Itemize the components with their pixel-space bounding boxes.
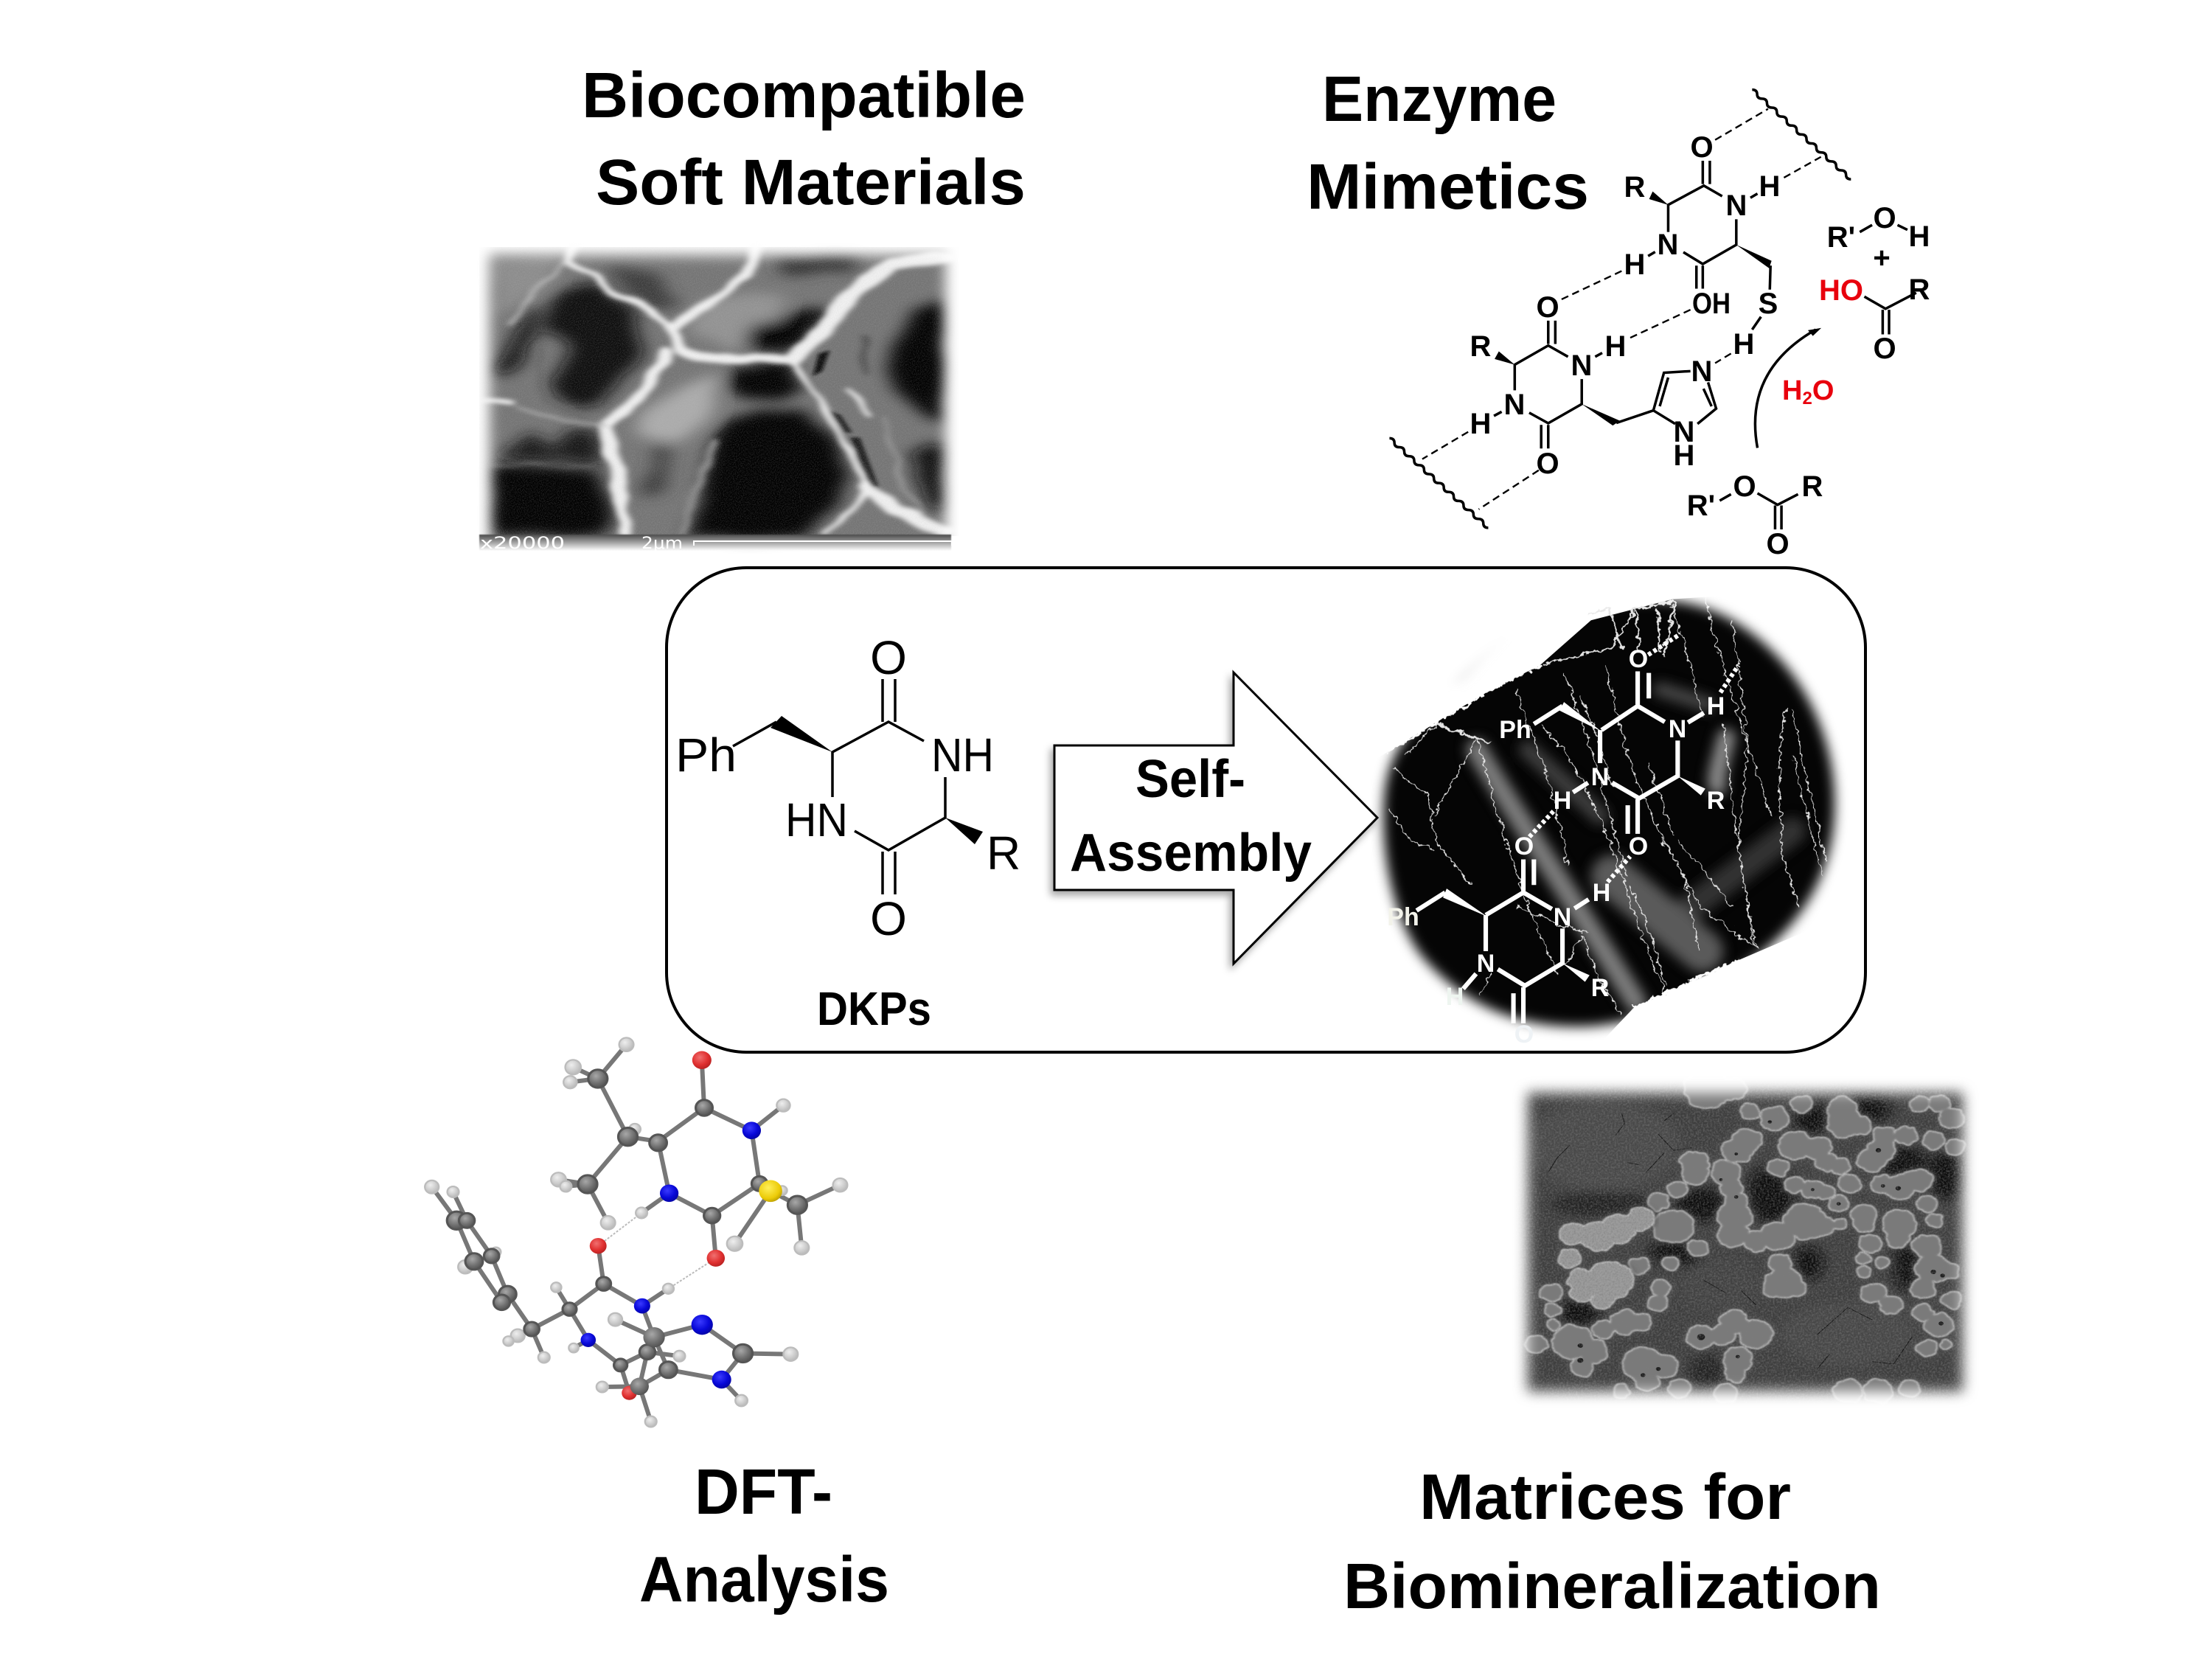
heading: Matrices for Biomineralization	[1343, 1461, 1881, 1622]
heading: DFT-Analysis: DFT-	[695, 1456, 832, 1528]
enzyme mimetic hydrogen-bonded catalytic structure: R'	[1687, 490, 1715, 522]
fibre network micrograph with molecular overlay: R	[1591, 974, 1609, 1002]
heading: Biocompatible Soft Materials	[582, 60, 1026, 218]
infographic canvas	[424, 71, 1973, 1615]
fibre network micrograph with molecular overlay: N	[1591, 763, 1609, 791]
enzyme mimetic hydrogen-bonded catalytic structure: H	[1733, 328, 1754, 361]
fibre network micrograph with molecular overlay: O	[1514, 832, 1534, 860]
DKP chemical structure	[675, 631, 1020, 945]
fibre network micrograph with molecular overlay: H	[1593, 879, 1610, 907]
enzyme mimetic hydrogen-bonded catalytic structure: H	[1674, 439, 1694, 472]
DKP chemical structure: HN	[785, 793, 848, 846]
enzyme mimetic hydrogen-bonded catalytic structure: OH	[1692, 288, 1731, 320]
fibre network micrograph with molecular overlay: R	[1707, 787, 1725, 815]
weak hydrogen bonds	[598, 1213, 716, 1289]
enzyme mimetic hydrogen-bonded catalytic structure: N	[1691, 355, 1712, 388]
enzyme mimetic hydrogen-bonded catalytic structure: R'	[1827, 221, 1855, 254]
enzyme mimetic hydrogen-bonded catalytic structure: N	[1674, 416, 1694, 448]
stereo wedges	[1495, 192, 1772, 425]
DKP chemical structure: NH	[931, 728, 994, 782]
enzyme mimetic hydrogen-bonded catalytic structure: O	[1873, 202, 1896, 234]
enzyme mimetic hydrogen-bonded catalytic structure: N	[1658, 229, 1678, 261]
enzyme mimetic hydrogen-bonded catalytic structure: N	[1571, 349, 1592, 382]
heading: Enzyme Mimetics	[1307, 63, 1589, 223]
fibre network micrograph with molecular overlay: N	[1477, 950, 1495, 978]
fibre network micrograph with molecular overlay: Ph	[1499, 716, 1531, 744]
fibre network micrograph with molecular overlay: H	[1446, 983, 1464, 1011]
wavy backbone lines	[1389, 90, 1851, 528]
enzyme mimetic hydrogen-bonded catalytic structure: N	[1726, 189, 1747, 222]
SEM scale bar	[479, 535, 952, 553]
heading: Matrices for Biomineralization: Matrices for	[1419, 1461, 1791, 1533]
enzyme mimetic hydrogen-bonded catalytic structure: HO	[1819, 274, 1863, 307]
DKP chemical structure: R	[987, 827, 1020, 880]
fibre network micrograph with molecular overlay	[1373, 597, 1845, 1043]
self-assembly arrow: Assembly	[1070, 824, 1312, 883]
enzyme mimetic hydrogen-bonded catalytic structure: H	[1605, 330, 1626, 363]
enzyme mimetic hydrogen-bonded catalytic structure	[1389, 90, 1930, 560]
enzyme mimetic hydrogen-bonded catalytic structure: O	[1733, 470, 1756, 503]
enzyme mimetic hydrogen-bonded catalytic structure: 2	[1802, 389, 1812, 408]
SEM micrograph: fibrous soft material	[479, 243, 959, 537]
enzyme mimetic hydrogen-bonded catalytic structure: O	[1812, 375, 1834, 406]
enzyme mimetic hydrogen-bonded catalytic structure: R	[1624, 171, 1646, 204]
enzyme mimetic hydrogen-bonded catalytic structure: H	[1624, 248, 1645, 281]
SEM micrograph: biomineral aggregates	[1517, 1082, 1973, 1402]
heading: Enzyme Mimetics: Enzyme	[1322, 63, 1557, 135]
enzyme mimetic hydrogen-bonded catalytic structure: H	[1909, 220, 1930, 253]
ester and products bonds	[1719, 225, 1916, 529]
fibre network micrograph with molecular overlay: H	[1707, 692, 1725, 720]
enzyme mimetic hydrogen-bonded catalytic structure: R	[1909, 274, 1930, 306]
heading: Matrices for Biomineralization: Biomineralization	[1343, 1551, 1881, 1622]
carbon atoms	[447, 1070, 807, 1378]
enzyme mimetic hydrogen-bonded catalytic structure: R	[1470, 330, 1492, 363]
reaction arrow	[1755, 330, 1815, 448]
enzyme mimetic hydrogen-bonded catalytic structure: O	[1873, 333, 1896, 365]
enzyme mimetic hydrogen-bonded catalytic structure: O	[1536, 291, 1559, 324]
lower DKP ring bonds	[1494, 321, 1717, 448]
fibre network micrograph with molecular overlay: H	[1554, 787, 1571, 815]
heading: DFT-Analysis: Analysis	[639, 1544, 889, 1615]
hydrogen atoms	[425, 1037, 847, 1427]
enzyme mimetic hydrogen-bonded catalytic structure: H	[1759, 170, 1780, 203]
stick bonds	[432, 1045, 840, 1422]
enzyme mimetic hydrogen-bonded catalytic structure: O	[1536, 448, 1559, 480]
enzyme mimetic hydrogen-bonded catalytic structure: R	[1802, 470, 1823, 503]
fibre network micrograph with molecular overlay: O	[1629, 645, 1648, 673]
SEM scale bar: x20000	[480, 535, 565, 553]
enzyme mimetic hydrogen-bonded catalytic structure: O	[1766, 528, 1790, 560]
DKP chemical structure: O	[870, 631, 907, 684]
fibre network micrograph with molecular overlay: N	[1554, 903, 1571, 931]
heading: Enzyme Mimetics: Mimetics	[1307, 151, 1589, 223]
enzyme mimetic hydrogen-bonded catalytic structure: +	[1873, 242, 1891, 274]
self-assembly arrow	[1054, 672, 1377, 964]
enzyme mimetic hydrogen-bonded catalytic structure: H	[1782, 375, 1802, 406]
enzyme mimetic hydrogen-bonded catalytic structure: N	[1504, 389, 1525, 421]
enzyme mimetic hydrogen-bonded catalytic structure: O	[1690, 131, 1714, 164]
DFT ball-and-stick model	[425, 1037, 847, 1427]
fibre network micrograph with molecular overlay: O	[1629, 832, 1648, 860]
SEM scale bar: 2μm	[641, 535, 683, 553]
DKP chemical structure: Ph	[675, 728, 737, 782]
fibre network micrograph with molecular overlay: Ph	[1387, 903, 1419, 931]
fibre network micrograph with molecular overlay: O	[1514, 1020, 1534, 1048]
sulfur, nitrogen and oxygen atoms	[581, 1051, 782, 1400]
enzyme mimetic hydrogen-bonded catalytic structure: S	[1759, 288, 1778, 320]
heading: Biocompatible Soft Materials: Biocompatible	[582, 60, 1026, 131]
enzyme mimetic hydrogen-bonded catalytic structure: H	[1470, 408, 1491, 440]
self-assembly arrow: Self-	[1135, 750, 1245, 809]
DKP chemical structure: O	[870, 892, 907, 945]
white molecular overlay bonds	[1416, 636, 1739, 1023]
central rounded panel	[667, 568, 1865, 1052]
fibre network micrograph with molecular overlay: N	[1669, 715, 1686, 743]
heading: DFT-Analysis	[639, 1456, 889, 1615]
hydrogen bonds	[1422, 109, 1821, 509]
heading: Biocompatible Soft Materials: Soft Materials	[596, 147, 1026, 218]
label: DKPs: DKPs	[817, 982, 931, 1035]
upper DKP ring bonds	[1648, 161, 1770, 330]
